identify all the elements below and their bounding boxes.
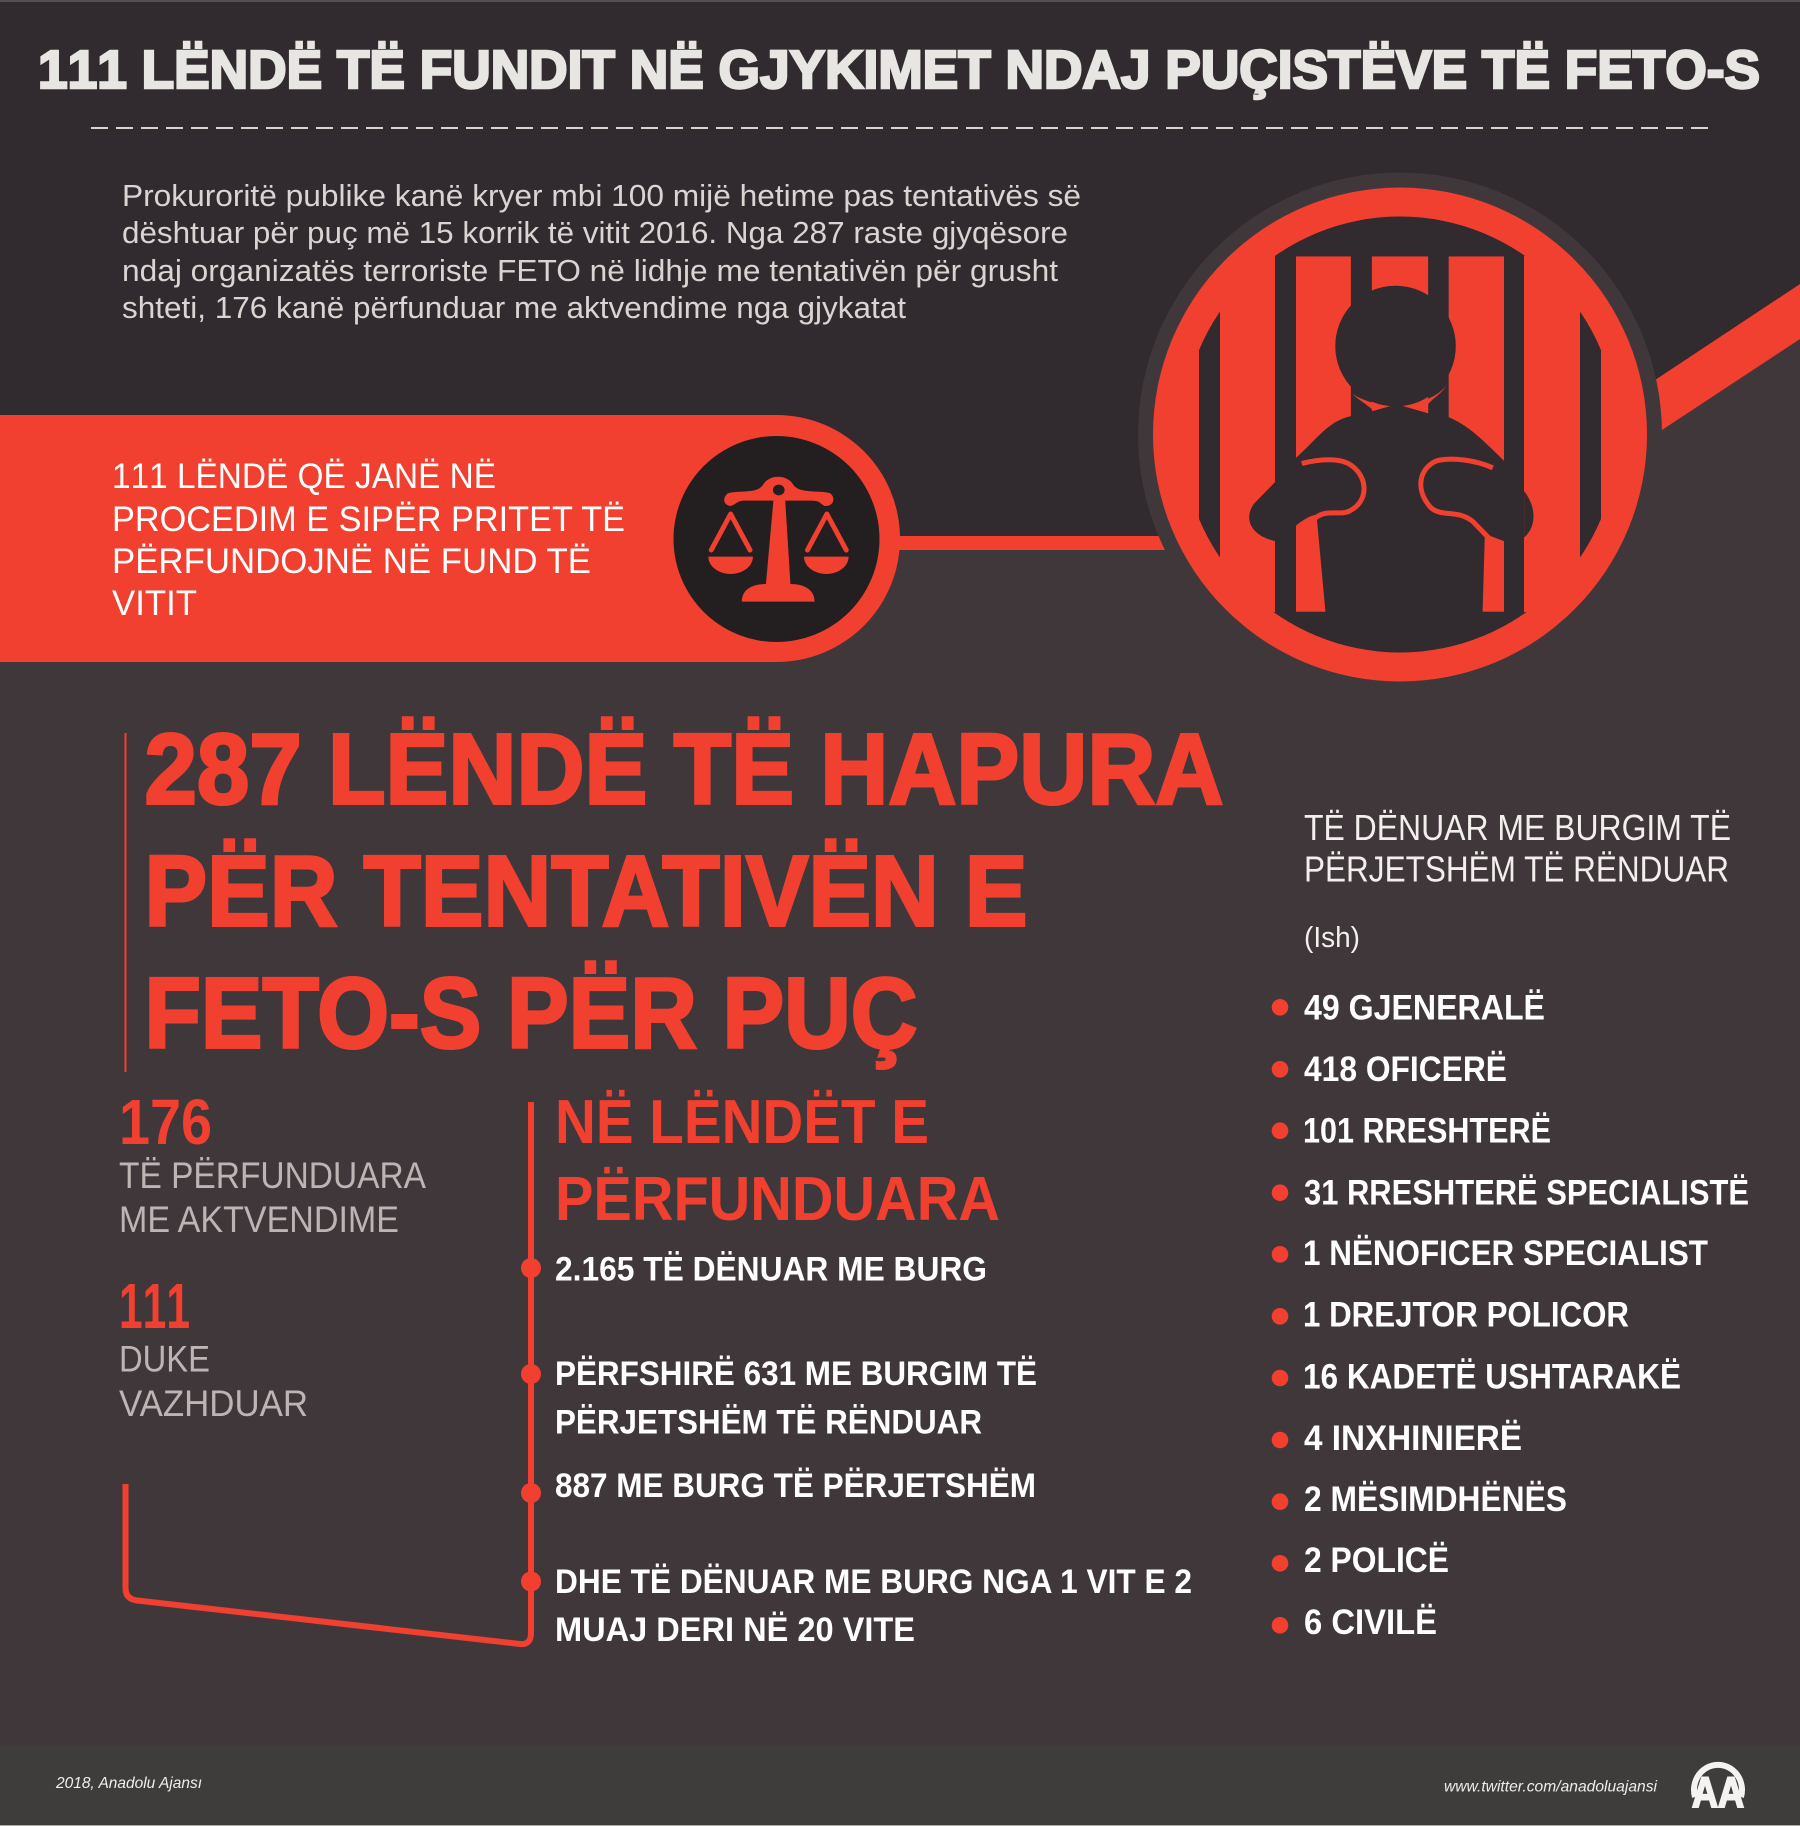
intro paragraph — [122, 179, 1081, 325]
intro paragraph: dështuar për puç më 15 korrik të vitit 2016. Nga 287 raste gjyqësore — [122, 216, 1068, 250]
list items: 31 RRESHTERË SPECIALISTË — [1304, 1173, 1749, 1212]
heading: aggravated life sentences: (Ish) — [1304, 922, 1360, 954]
list: sentences: PËRFSHIRË 631 ME BURGIM TË — [555, 1355, 1037, 1393]
banner text: PËRFUNDOJNË NË FUND TË — [112, 542, 591, 581]
list items: 49 GJENERALË — [1304, 988, 1545, 1027]
bullets — [1272, 999, 1288, 1634]
list: sentences — [555, 1250, 1192, 1649]
stat: 176 concluded: ME AKTVENDIME — [119, 1199, 399, 1240]
list: sentences: 887 ME BURG TË PËRJETSHËM — [555, 1467, 1036, 1505]
banner text — [112, 457, 625, 623]
banner text: PROCEDIM E SIPËR PRITET TË — [112, 500, 625, 539]
headline: 287 cases: FETO-S PËR PUÇ — [144, 958, 918, 1070]
footer credit: 2018, Anadolu Ajansı — [55, 1775, 202, 1792]
stat: 111 ongoing — [119, 1270, 308, 1424]
stat: 176 concluded — [119, 1086, 426, 1240]
panel: red banner — [0, 415, 900, 662]
title: 111 LËNDË TË FUNDIT NË GJYKIMET NDAJ PUÇISTËVE TË FETO-S — [38, 41, 1760, 100]
list items: 418 OFICERË — [1304, 1050, 1507, 1089]
heading: concluded cases — [555, 1087, 1000, 1234]
heading: aggravated life sentences — [1304, 807, 1731, 954]
heading: concluded cases: NË LËNDËT E — [555, 1087, 929, 1157]
list items: 16 KADETË USHTARAKË — [1303, 1357, 1681, 1396]
list items: 1 NËNOFICER SPECIALIST — [1303, 1234, 1708, 1273]
icon: AA logo: AA — [1692, 1769, 1744, 1817]
stat: 111 ongoing: VAZHDUAR — [119, 1383, 308, 1424]
stat: 176 concluded: 176 — [119, 1086, 212, 1158]
list: sentences: DHE TË DËNUAR ME BURG NGA 1 VIT E 2 — [555, 1563, 1192, 1601]
intro paragraph: Prokuroritë publike kanë kryer mbi 100 mijë hetime pas tentativës së — [122, 179, 1081, 213]
connector timeline — [126, 1102, 541, 1644]
stat: 111 ongoing: 111 — [119, 1270, 190, 1342]
footer bar — [0, 1746, 1800, 1826]
list: convicted by profession — [1272, 988, 1749, 1642]
list items: 1 DREJTOR POLICOR — [1303, 1296, 1629, 1335]
list items: 101 RRESHTERË — [1303, 1112, 1551, 1151]
heading: aggravated life sentences: TË DËNUAR ME BURGIM TË — [1304, 807, 1731, 848]
list: sentences: MUAJ DERI NË 20 VITE — [555, 1611, 915, 1649]
stat: 111 ongoing: DUKE — [119, 1338, 210, 1380]
headline: 287 cases — [124, 714, 1224, 1072]
list items: 4 INXHINIERË — [1304, 1419, 1522, 1458]
intro paragraph: ndaj organizatës terroriste FETO në lidhje me tentativën për grusht — [122, 254, 1059, 288]
intro paragraph: shteti, 176 kanë përfunduar me aktvendime nga gjykatat — [122, 291, 907, 325]
list items: 2 MËSIMDHËNËS — [1304, 1480, 1567, 1519]
icon: prisoner behind bars — [1138, 172, 1662, 696]
list items: 2 POLICË — [1304, 1541, 1449, 1580]
list: sentences: PËRJETSHËM TË RËNDUAR — [555, 1404, 982, 1442]
headline: 287 cases: PËR TENTATIVËN E — [144, 836, 1028, 948]
list items — [1303, 988, 1749, 1642]
footer url: www.twitter.com/anadoluajansi — [1444, 1778, 1657, 1796]
icon: scales of justice — [674, 436, 880, 642]
banner text: VITIT — [112, 584, 197, 623]
list items: 6 CIVILË — [1304, 1603, 1437, 1642]
connector lines to prison icon — [880, 284, 1800, 550]
heading: aggravated life sentences: PËRJETSHËM TË RËNDUAR — [1304, 848, 1729, 890]
list: sentences: 2.165 TË DËNUAR ME BURG — [555, 1250, 987, 1288]
headline: 287 cases: 287 LËNDË TË HAPURA — [144, 714, 1224, 826]
stat: 176 concluded: TË PËRFUNDUARA — [119, 1155, 426, 1196]
heading: concluded cases: PËRFUNDUARA — [555, 1164, 1000, 1234]
banner text: 111 LËNDË QË JANË NË — [112, 457, 496, 496]
